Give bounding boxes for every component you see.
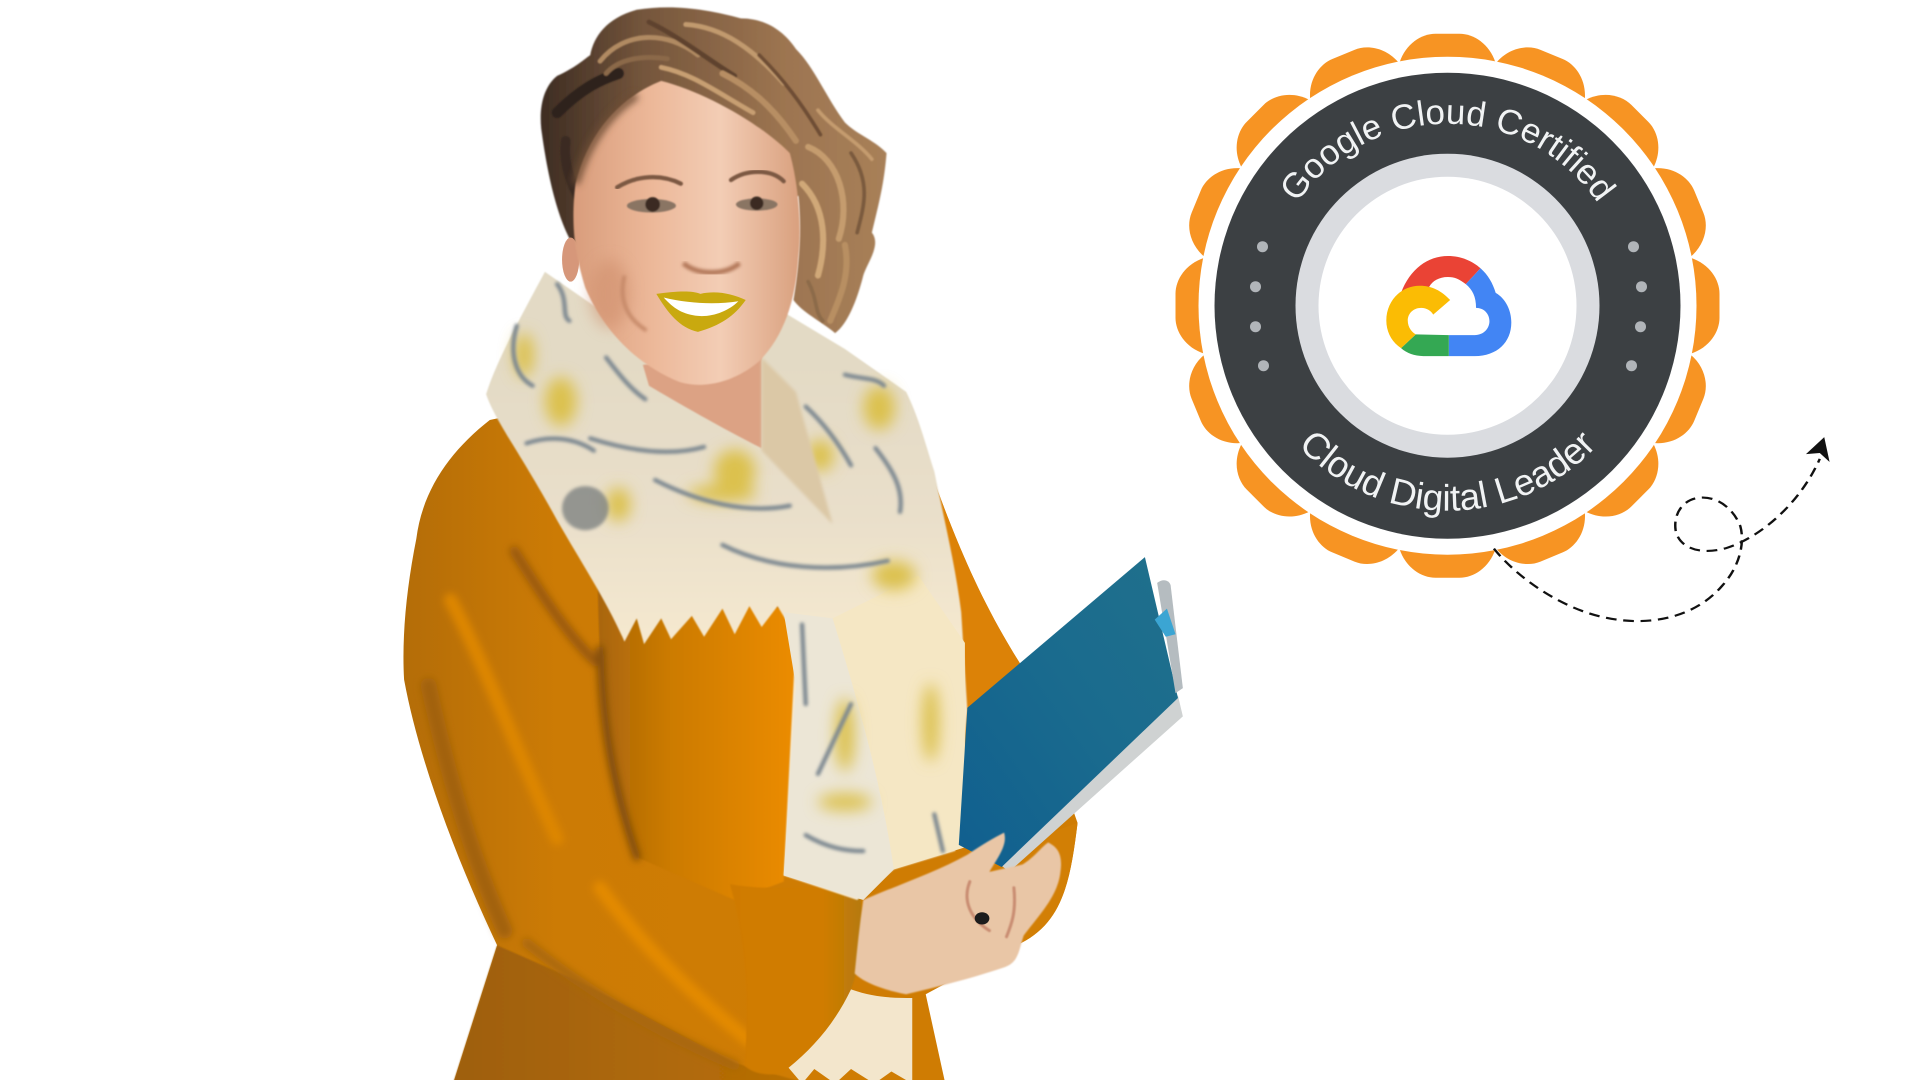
grey inner ring xyxy=(1296,154,1600,458)
scarf blue-grey pattern xyxy=(513,284,943,851)
left dots xyxy=(1250,241,1269,371)
white centre xyxy=(1318,177,1576,435)
nose shadow xyxy=(683,263,740,272)
dark ring xyxy=(1214,73,1680,539)
logo yellow xyxy=(1386,286,1450,348)
scarf yellow blotches xyxy=(514,333,939,811)
sleeve folds xyxy=(429,551,749,1065)
right dots xyxy=(1626,241,1647,371)
face xyxy=(573,81,800,385)
logo green xyxy=(1401,334,1449,356)
scarf tail xyxy=(789,989,912,1080)
neck xyxy=(643,349,762,448)
teeth xyxy=(664,298,738,316)
hand xyxy=(855,833,1061,994)
temple hair shadow xyxy=(576,96,637,184)
dress silhouette xyxy=(403,367,1078,1080)
smile line xyxy=(623,276,647,331)
dashed line xyxy=(1494,459,1820,621)
tablet xyxy=(959,557,1183,872)
hair mass xyxy=(541,7,887,333)
tablet silver edge xyxy=(994,696,1183,872)
eyebrows xyxy=(617,172,784,187)
right eye xyxy=(736,197,778,211)
ear xyxy=(562,238,579,282)
ring xyxy=(975,912,989,924)
logo blue xyxy=(1449,268,1511,356)
pen xyxy=(1157,580,1183,693)
lips xyxy=(656,292,746,332)
person: woman holding a tablet xyxy=(403,7,1183,1080)
hair curls xyxy=(557,22,872,321)
cheek shading xyxy=(590,260,629,328)
torso xyxy=(598,576,798,900)
scarf xyxy=(486,272,967,900)
logo red xyxy=(1401,256,1481,293)
arrowhead xyxy=(1806,437,1830,462)
hair xyxy=(541,7,887,333)
right sleeve end xyxy=(980,823,1078,945)
skirt xyxy=(453,945,808,1080)
pen clip xyxy=(1155,609,1176,637)
icon: Google Cloud logo xyxy=(1386,256,1511,356)
left eye xyxy=(627,197,676,212)
scarf inner fold xyxy=(762,358,833,524)
top arc text: Google Cloud Certified xyxy=(1283,100,1617,202)
right back sleeve xyxy=(931,471,1022,722)
scarf base xyxy=(486,272,967,900)
finger shadows xyxy=(967,882,1015,937)
scalloped orange edge xyxy=(1176,34,1720,578)
bottom arc text: Cloud Digital Leader xyxy=(1304,432,1592,518)
arrow: dashed looping arrow xyxy=(1494,437,1830,621)
scarf cream strip xyxy=(833,576,965,869)
scarf patterned strip xyxy=(784,612,894,900)
tablet cover xyxy=(959,557,1178,867)
badge: Google Cloud Certified xyxy=(1176,34,1760,618)
white ring xyxy=(1198,57,1696,555)
scarf round motif xyxy=(562,486,609,530)
cuff xyxy=(730,884,862,1074)
